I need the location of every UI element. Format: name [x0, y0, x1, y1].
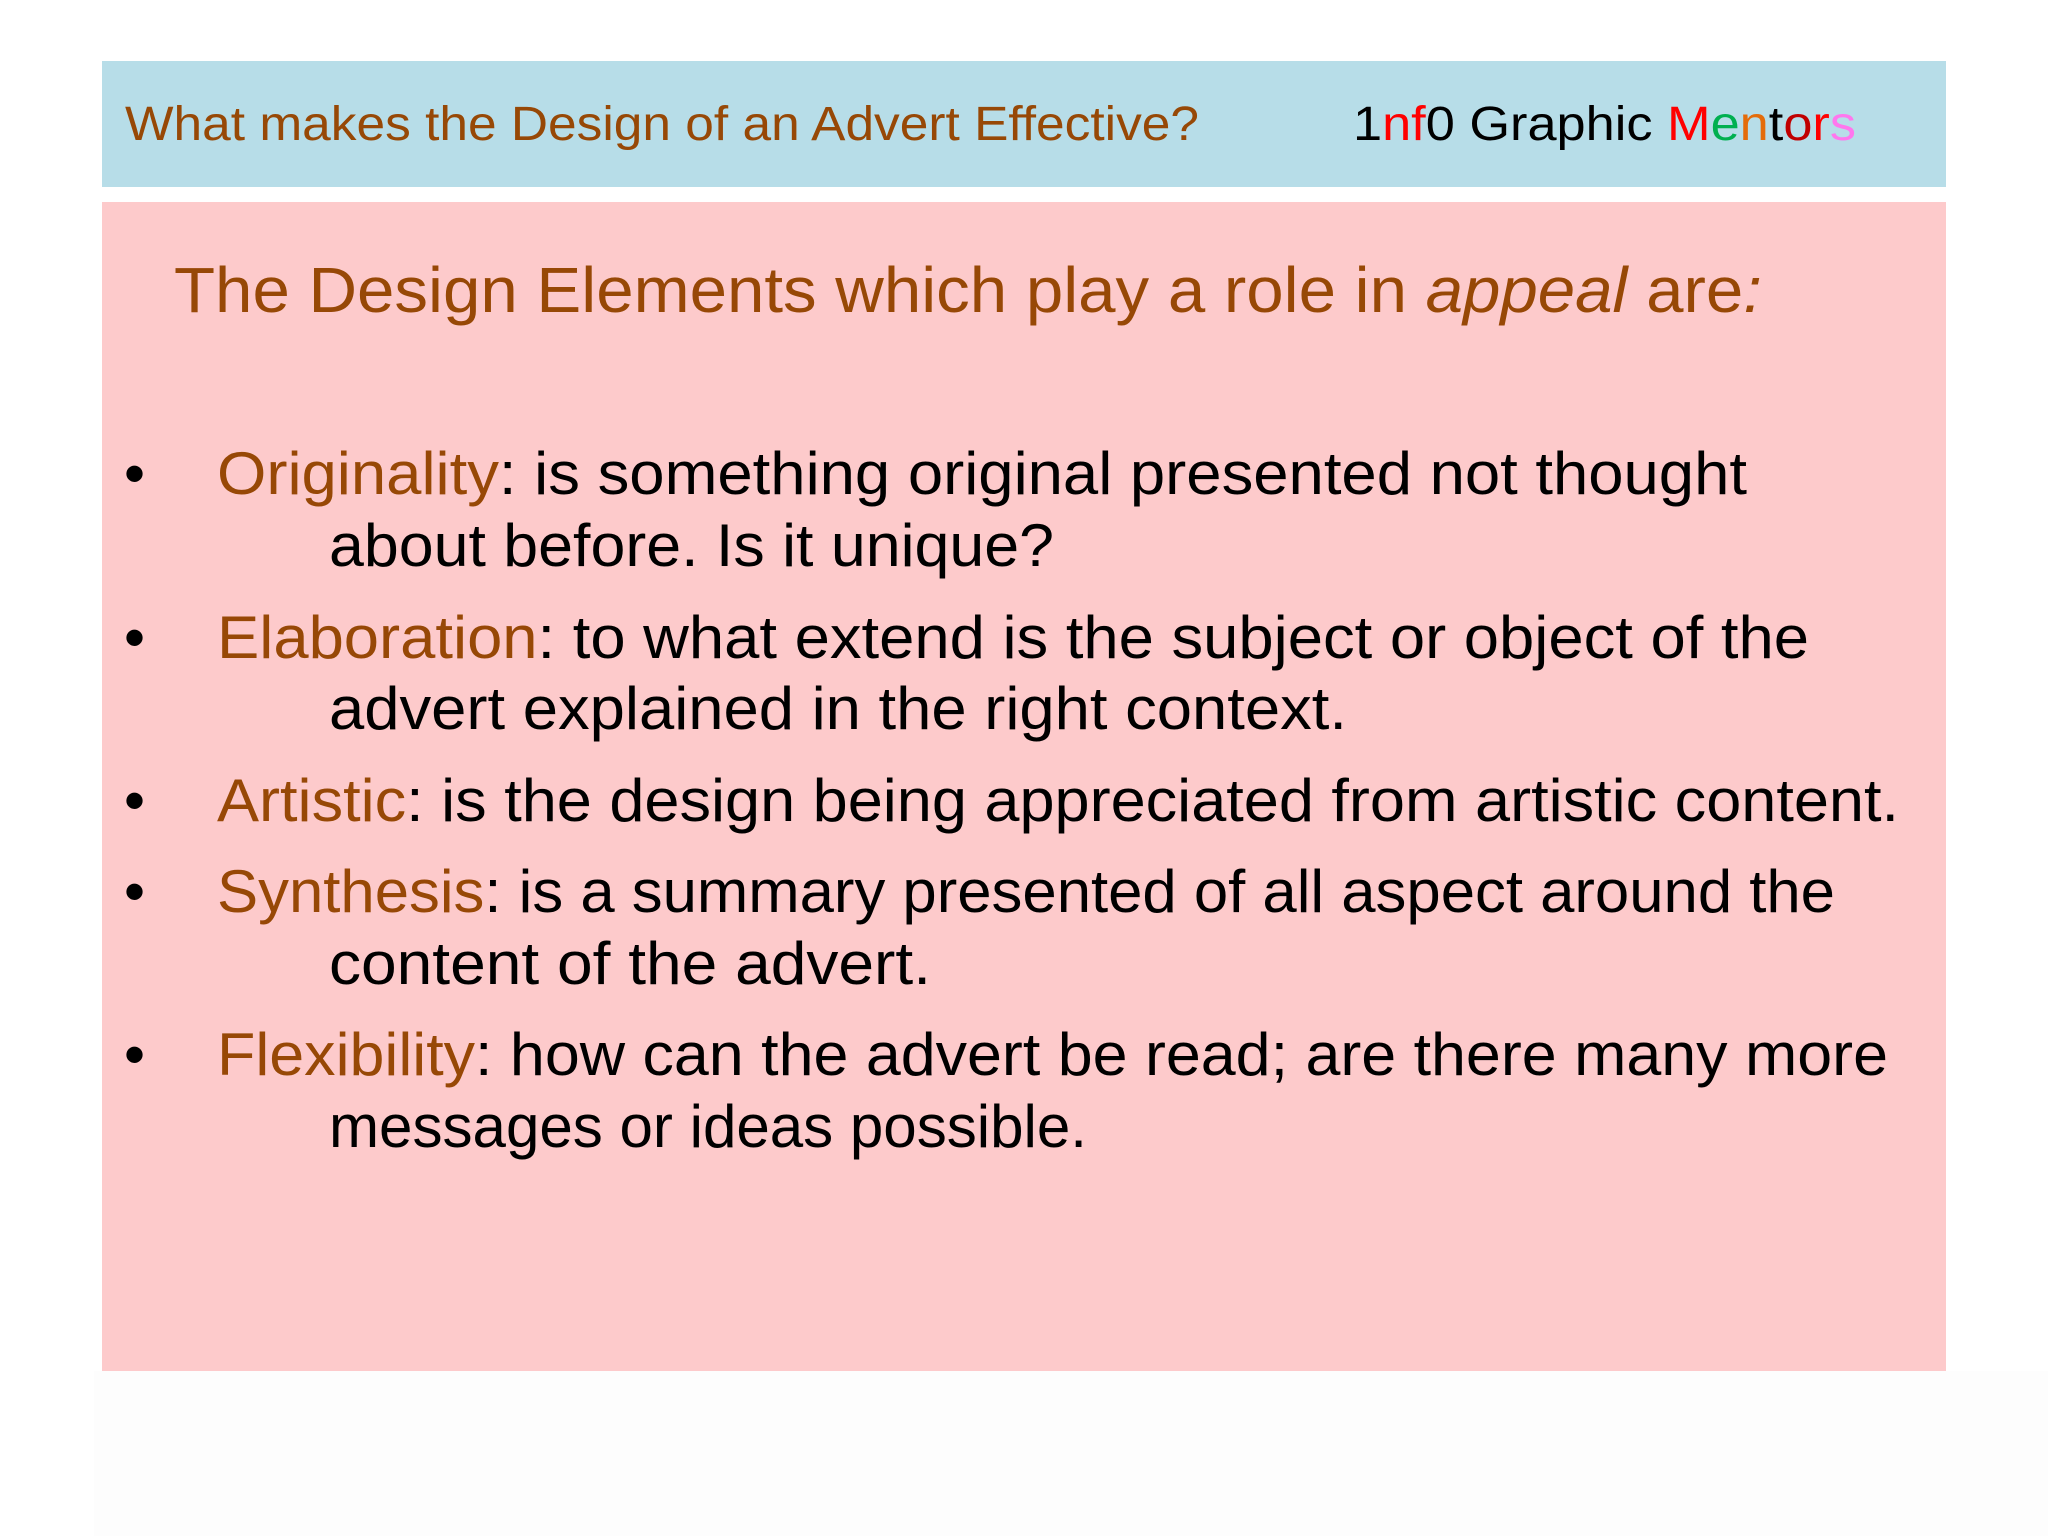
bullet: elaboration: • — [124, 604, 145, 671]
bullet: synthesis — [124, 858, 1835, 997]
bullet: elaboration: Elaboration : to what extend is the subject or object of the — [217, 604, 1809, 671]
bullet: originality — [124, 440, 1747, 579]
header title: What makes the Design of an Advert Effective? — [125, 98, 1199, 151]
header bar — [102, 61, 1946, 187]
bullet: artistic: Artistic: is the design being appreciated from artistic content. — [217, 767, 1899, 834]
bullet: originality: about before. Is it unique? — [329, 512, 1054, 579]
bullet: synthesis: Synthesis: is a summary presented of all aspect around the — [217, 858, 1835, 925]
bullet: flexibility: • — [124, 1021, 145, 1088]
bullet: synthesis: • — [124, 858, 145, 925]
bullet: originality: Originality : is something original presented not thought — [217, 440, 1747, 507]
bullet: synthesis: content of the advert. — [329, 930, 931, 997]
bullet list — [124, 440, 1899, 1160]
bullet: flexibility: Flexibility: how can the advert be read; are there many more — [217, 1021, 1888, 1088]
bullet: originality: • — [124, 440, 145, 507]
bullet: elaboration — [124, 604, 1809, 742]
bullet: elaboration: advert explained in the right context. — [329, 675, 1347, 742]
panel: design elements — [102, 202, 1946, 1371]
heading: The Design Elements which play a role in appeal are: — [174, 254, 1762, 326]
bullet: artistic: • — [124, 767, 145, 834]
brand name: 1nf0 Graphic Mentors — [1353, 98, 1856, 151]
bullet: flexibility — [124, 1021, 1888, 1160]
bullet: flexibility: messages or ideas possible. — [329, 1093, 1087, 1160]
